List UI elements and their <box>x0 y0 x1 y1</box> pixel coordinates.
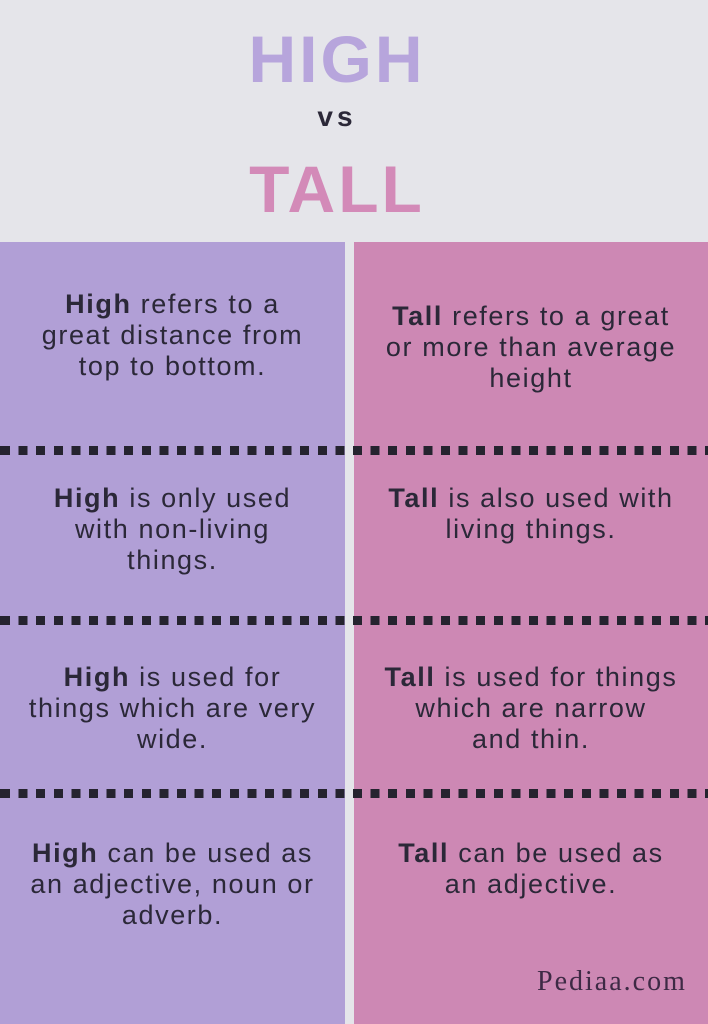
text: tall definition: or more than average <box>386 332 676 362</box>
text: high wide: High is used for <box>64 662 281 692</box>
text: tall living <box>388 483 674 544</box>
text: high parts of speech <box>30 838 315 930</box>
text: tall definition: height <box>489 363 573 393</box>
text: high parts of speech: an adjective, noun or <box>30 869 315 899</box>
text: high non-living: with non-living <box>75 514 270 544</box>
text: high parts of speech: adverb. <box>122 900 223 930</box>
text: tall living: living things. <box>446 514 616 544</box>
text: tall definition <box>386 301 676 393</box>
title: vs: vs <box>317 101 357 132</box>
panel: High column <box>0 242 345 1024</box>
text: high definition: top to bottom. <box>79 351 266 381</box>
text: high wide: wide. <box>137 724 208 754</box>
text: tall narrow: Tall is used for things <box>385 662 677 692</box>
text: high wide <box>29 662 316 754</box>
title: TALL: TALL <box>249 152 425 226</box>
text: high non-living <box>54 483 291 575</box>
text: high wide: things which are very <box>29 693 316 723</box>
text: high definition: High refers to a <box>65 289 280 319</box>
text: high parts of speech: High can be used as <box>32 838 313 868</box>
text: tall narrow: which are narrow <box>415 693 647 723</box>
text: high definition <box>42 289 303 381</box>
text: tall adjective: an adjective. <box>445 869 617 899</box>
text: tall definition: Tall refers to a great <box>392 301 670 331</box>
text: tall living: Tall is also used with <box>388 483 674 513</box>
text: tall narrow: and thin. <box>472 724 590 754</box>
text: high non-living: things. <box>127 545 218 575</box>
text: tall narrow <box>384 662 677 754</box>
logo: Pediaa.com: Pediaa.com <box>537 966 687 997</box>
text: high non-living: High is only used <box>54 483 291 513</box>
panel: Tall column <box>354 242 708 1024</box>
text: tall adjective <box>398 838 664 899</box>
text: tall adjective: Tall can be used as <box>398 838 664 868</box>
title: HIGH: HIGH <box>248 22 426 96</box>
text: high definition: great distance from <box>42 320 303 350</box>
